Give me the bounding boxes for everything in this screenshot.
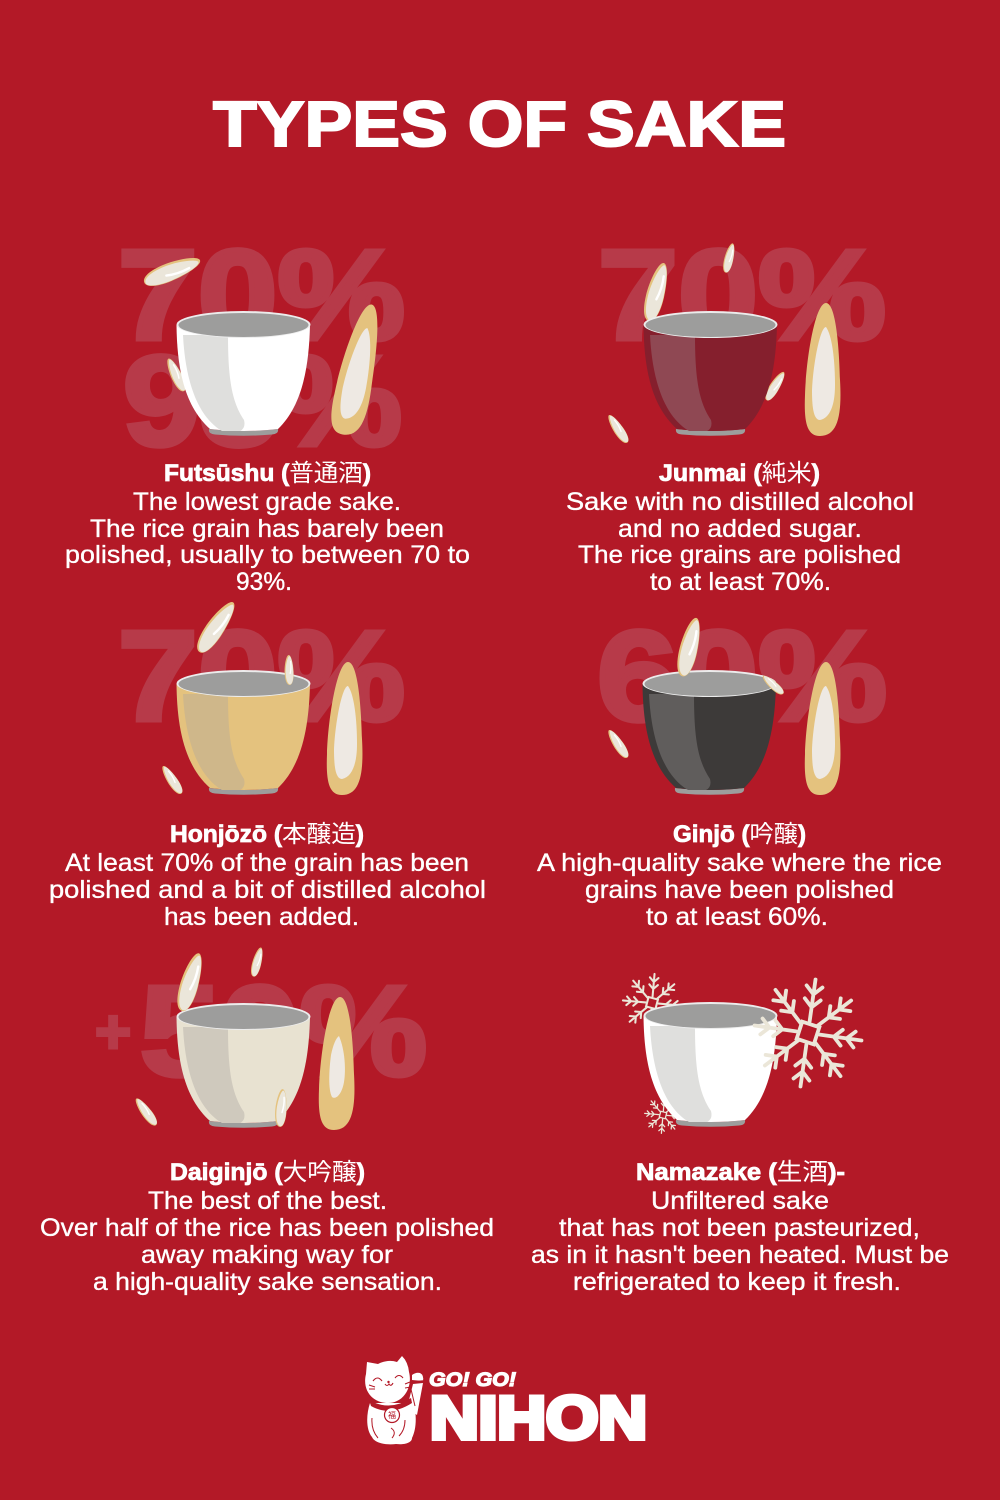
description text: The rice grains are polished (578, 541, 901, 569)
rice grains behind cup (640, 261, 788, 403)
description text: Over half of the rice has been polished (40, 1214, 494, 1242)
sake cup white (176, 311, 310, 436)
description text: has been added. (164, 903, 359, 931)
description text: 93%. (236, 568, 292, 596)
description text: Honjōzō (本醸造) (170, 821, 364, 848)
description text: Daiginjō (大吟醸) (170, 1159, 365, 1186)
text: Go! Go!: GO! GO! (429, 1370, 516, 1391)
description text: polished and a bit of distilled alcohol (49, 876, 486, 904)
panel: Junmai (566, 224, 914, 596)
percentage number 70%: 70% (118, 605, 405, 748)
sake cup tan (176, 670, 310, 795)
percentage numbers 70% and 93%: 70% (118, 224, 405, 367)
sake cup charcoal (642, 670, 776, 795)
rice grains flying (132, 946, 288, 1128)
description text (65, 460, 470, 596)
description text: grains have been polished (585, 876, 894, 904)
description text: The best of the best. (148, 1187, 387, 1215)
description text: A high-quality sake where the rice (537, 849, 942, 877)
description text: away making way for (141, 1241, 393, 1269)
rice grains flying (604, 616, 786, 760)
panel: Futsushu (65, 224, 470, 596)
percentage number 60%: 60% (597, 605, 887, 748)
sake cup cream (176, 1003, 310, 1128)
description text: polished, usually to between 70 to (65, 541, 470, 569)
large rice grain (328, 301, 386, 438)
description text (566, 460, 914, 596)
title: TYPES OF SAKE (213, 88, 786, 160)
rice grains flying (158, 597, 294, 796)
percentage number +50%: + (95, 998, 131, 1067)
description text (537, 821, 942, 931)
icon: lucky cat: 福 (388, 1410, 396, 1420)
description text: Namazake ( 生酒)- (636, 1159, 845, 1186)
panel: Namazake (531, 971, 949, 1296)
large rice grain (319, 997, 354, 1130)
rice grain small behind cup (163, 357, 189, 393)
large rice grain (805, 303, 840, 436)
percentage number +50%: 50% (140, 960, 427, 1103)
text: Nihon: NIHON (430, 1384, 647, 1452)
description text: The rice grain has barely been (90, 515, 444, 543)
description text: The lowest grade sake. (133, 488, 401, 516)
large rice grain (327, 662, 362, 795)
description text: a high-quality sake sensation. (93, 1268, 442, 1296)
percentage numbers 70% and 93%: 93% (123, 330, 402, 473)
description text: Futsūshu (普通酒) (164, 460, 371, 487)
rice grain flying (141, 251, 203, 291)
large rice grain (805, 662, 840, 795)
percentage numbers 70% and 93% (118, 224, 405, 473)
small snowflakes behind cup (620, 971, 684, 1135)
description text: Unfiltered sake (651, 1187, 829, 1215)
panel: Honjozo (49, 597, 486, 931)
description text (531, 1159, 949, 1296)
large snowflake (747, 972, 869, 1094)
description text: Ginjō (吟醸) (673, 821, 806, 848)
description text (40, 1159, 494, 1296)
description text: refrigerated to keep it fresh. (573, 1268, 901, 1296)
logo: Go! Go! Nihon (365, 1356, 647, 1452)
rice grains flying (604, 242, 737, 445)
description text: Junmai (純米) (659, 460, 820, 487)
description text: At least 70% of the grain has been (65, 849, 469, 877)
description text: that has not been pasteurized, (559, 1214, 920, 1242)
description text: as in it hasn't been heated. Must be (531, 1241, 949, 1269)
description text: Sake with no distilled alcohol (566, 488, 914, 516)
panel: Ginjo (537, 605, 942, 931)
percentage number 70%: 70% (598, 224, 886, 367)
sake cup dark red (644, 311, 778, 436)
description text: to at least 70%. (650, 568, 831, 596)
description text: to at least 60%. (646, 903, 828, 931)
description text (49, 821, 486, 931)
icon: lucky cat (365, 1356, 423, 1444)
panel: Daiginjo (40, 946, 494, 1296)
sake cup white (644, 1002, 778, 1127)
description text: and no added sugar. (618, 515, 862, 543)
